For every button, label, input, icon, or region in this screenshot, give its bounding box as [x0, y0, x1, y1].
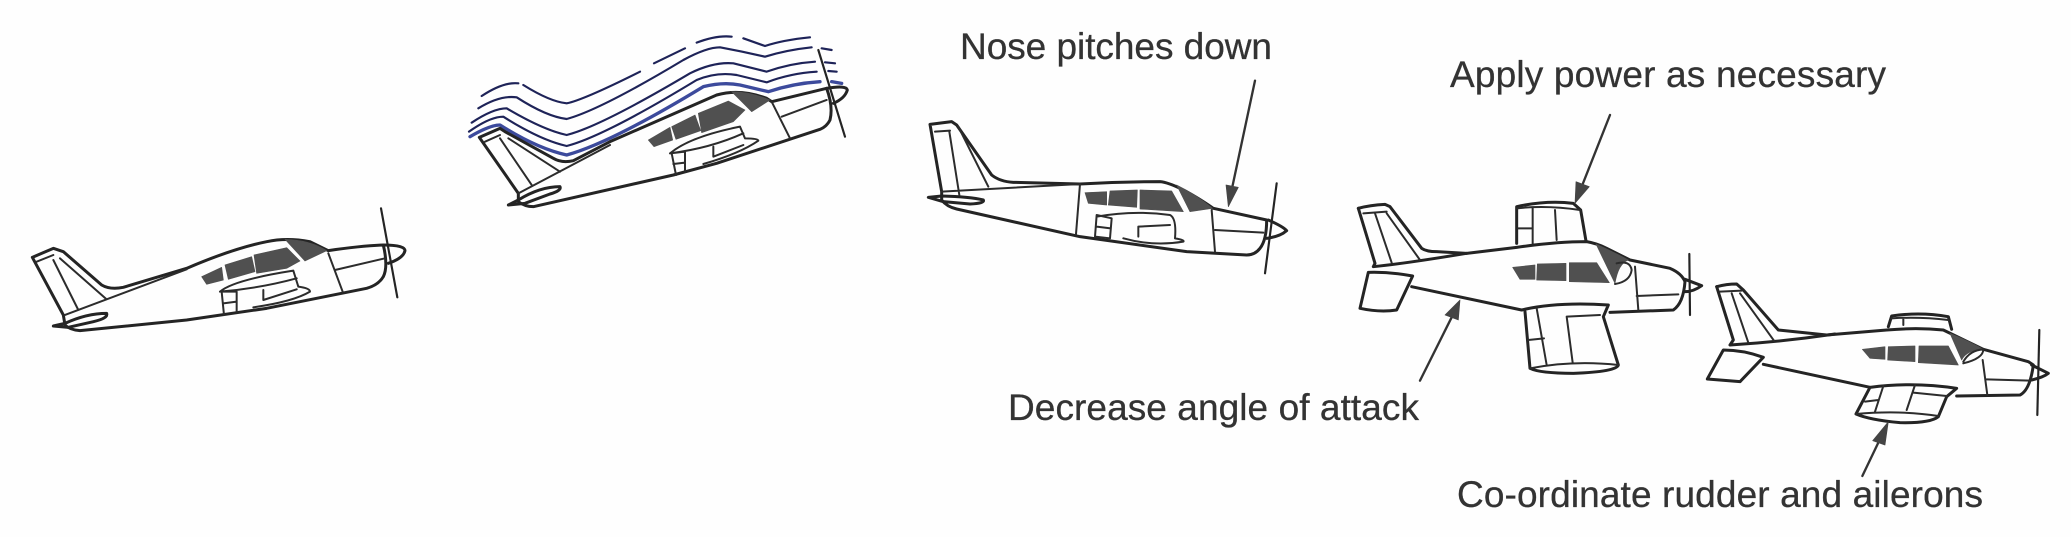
plane 2: nose high at the stall with airflow breaking away	[469, 36, 847, 207]
plane 1: level flight approaching the stall	[32, 208, 405, 331]
plane 3: nose pitching down	[928, 122, 1287, 273]
plane 5: final recovery with co-ordinated rudder and ailerons	[1707, 284, 2048, 423]
lower wing	[1856, 385, 1957, 423]
arrow: apply power	[1575, 115, 1610, 203]
label: decrease angle of attack: Decrease angle of attack	[1008, 387, 1420, 428]
label: apply power as necessary: Apply power as necessary	[1450, 54, 1886, 95]
upper wing	[1517, 202, 1586, 243]
upper wing	[1888, 314, 1952, 329]
arrow: decrease angle of attack	[1420, 300, 1460, 381]
arrow: co-ordinate rudder and ailerons	[1862, 422, 1888, 476]
lower wing	[1522, 304, 1618, 373]
label: co-ordinate rudder and ailerons: Co-ordinate rudder and ailerons	[1457, 474, 1983, 515]
airflow streamlines	[469, 36, 842, 155]
plane 4: recovering, applying power and decreasing angle of attack	[1358, 202, 1702, 373]
arrow: nose pitches down	[1226, 81, 1255, 207]
label: nose pitches down: Nose pitches down	[960, 26, 1272, 67]
